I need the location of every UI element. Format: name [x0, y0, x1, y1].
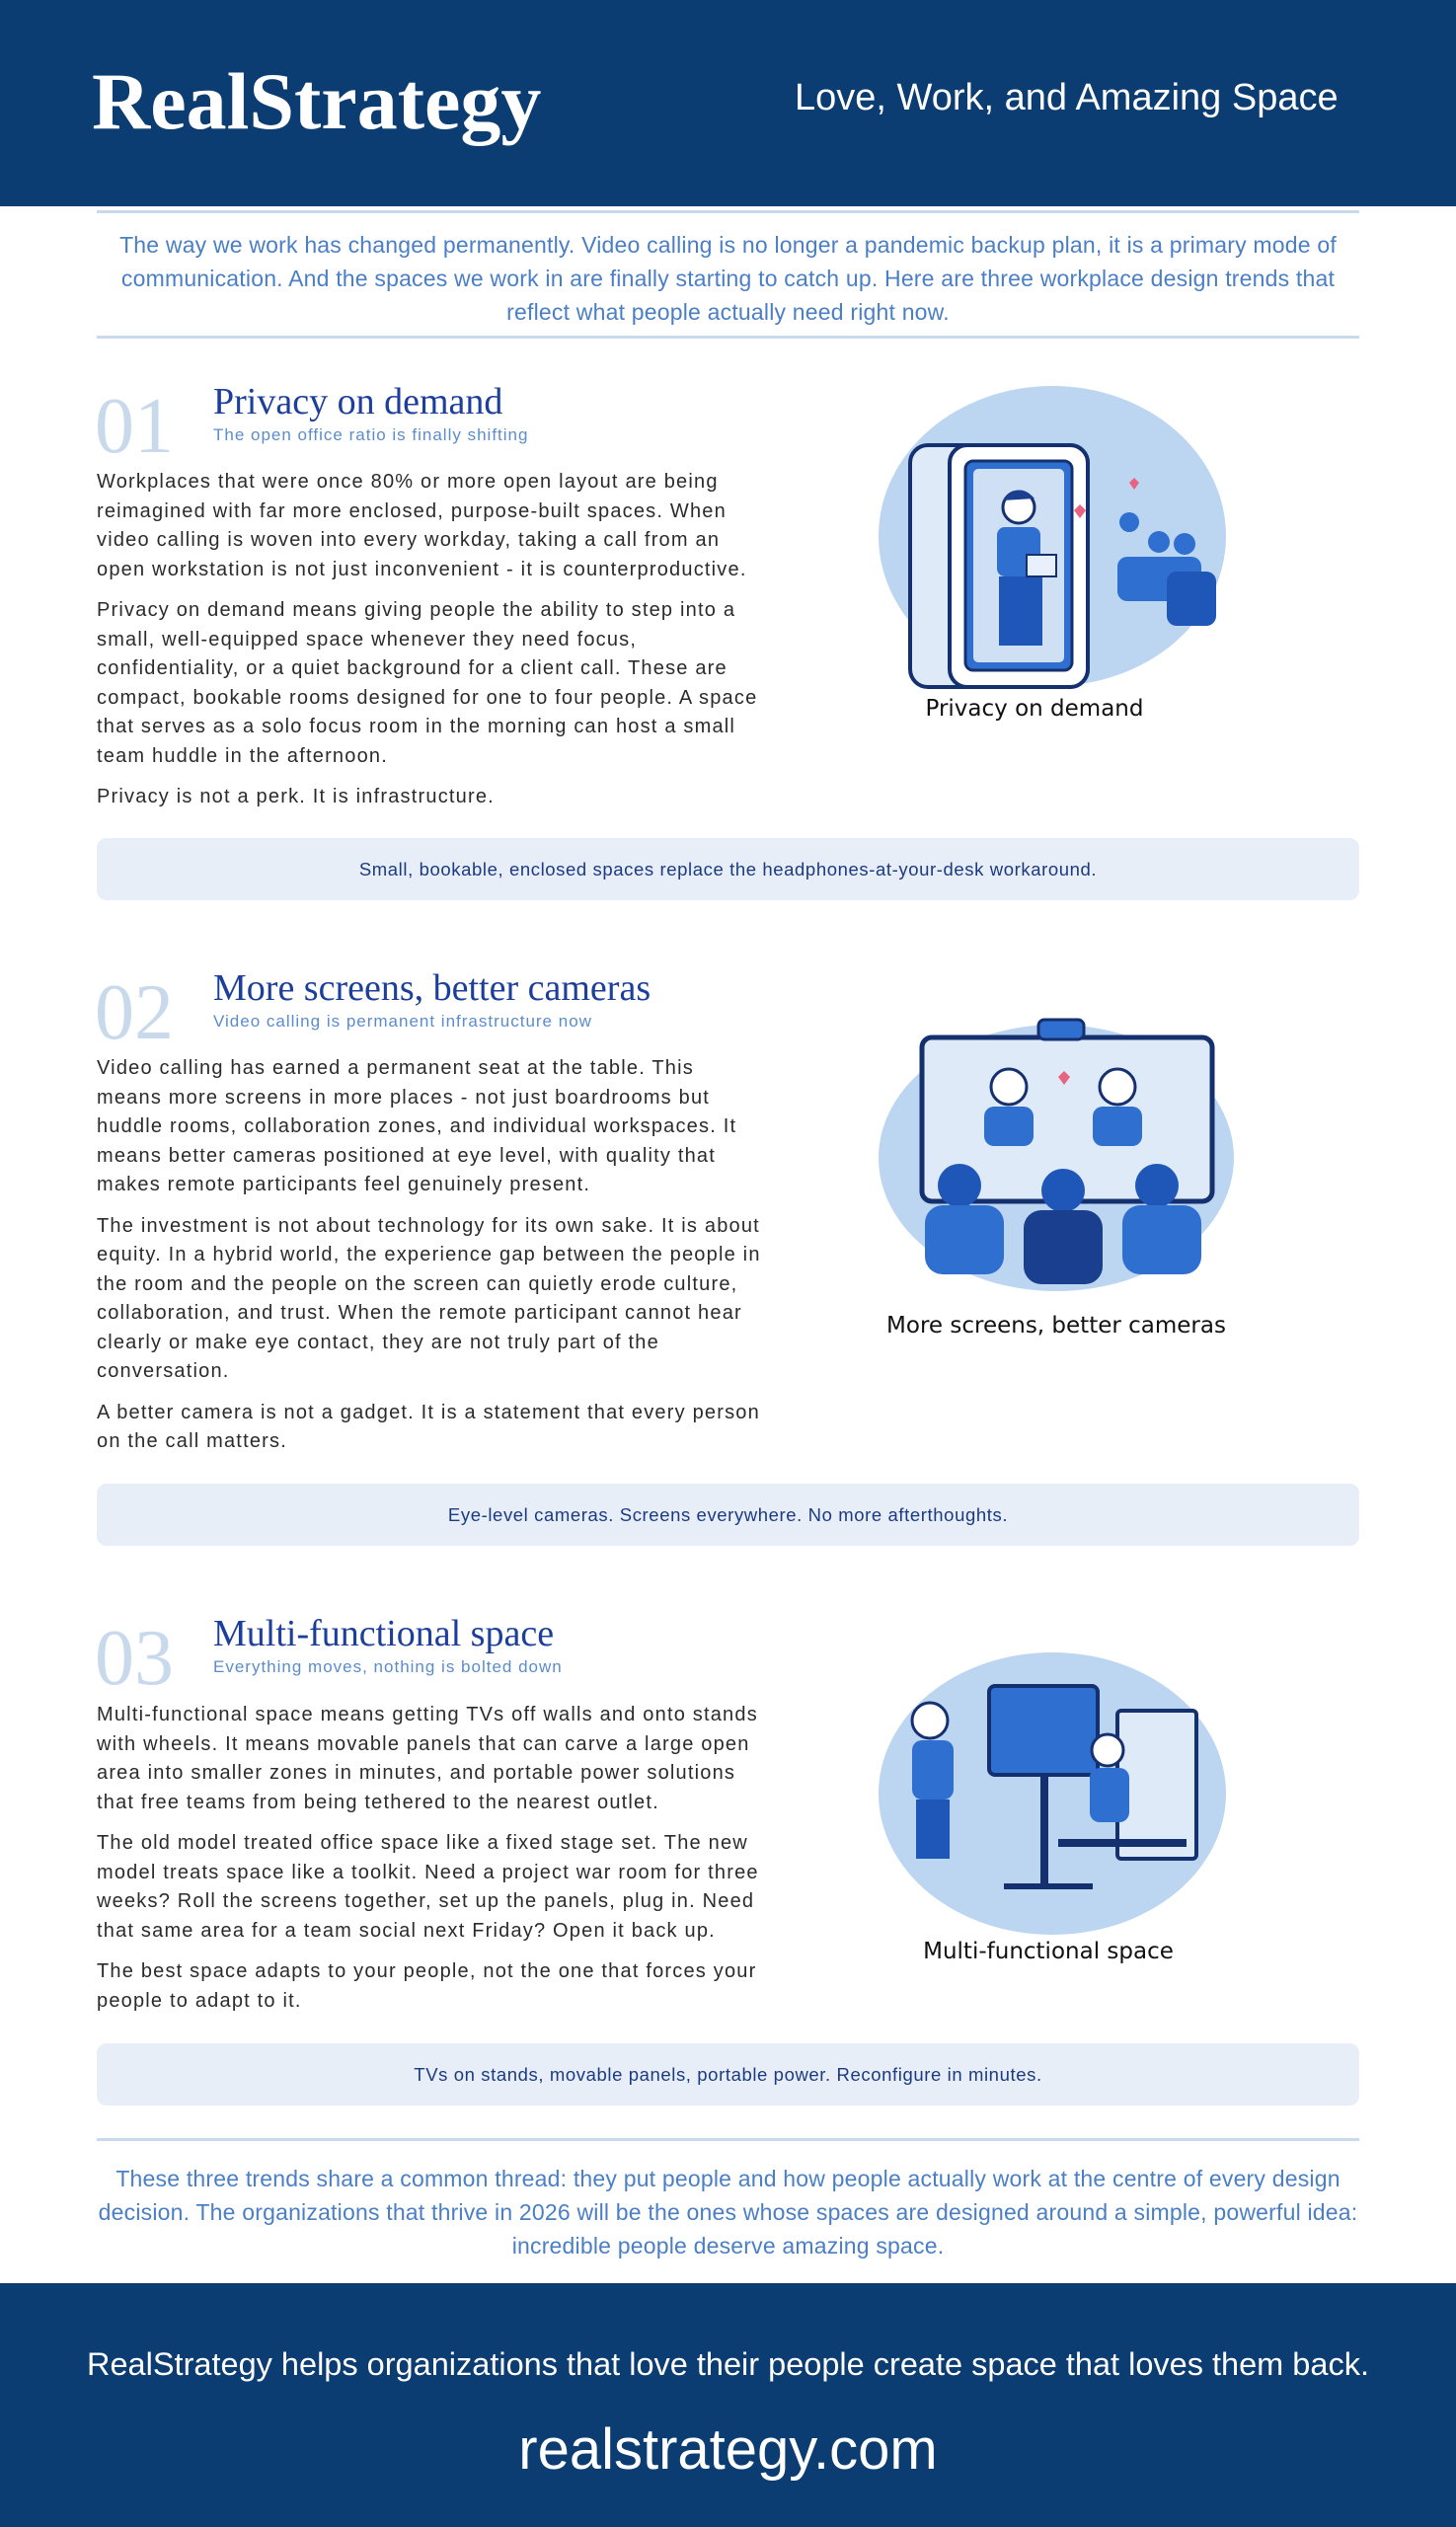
illustration: screens and cameras	[879, 1019, 1234, 1339]
section 01 body: Workplaces that were once 80% or more open layout are being	[97, 471, 719, 493]
section 02 body: makes remote participants feel genuinely present.	[97, 1174, 590, 1195]
section 02 body: equity. In a hybrid world, the experience gap between the people in	[97, 1244, 761, 1265]
section 01 body: video calling is woven into every workday, taking a call from an	[97, 529, 720, 551]
section 01 body: that serves as a solo focus room in the morning can host a small	[97, 716, 735, 737]
section 03 body: model treats space like a toolkit. Need a project war room for three	[97, 1862, 759, 1883]
section 03 title: Multi-functional space	[213, 1613, 554, 1654]
section 03 callout	[97, 2043, 1359, 2106]
intro text: reflect what people actually need right now.	[506, 299, 950, 325]
section 02 body: collaboration, and trust. When the remote participant cannot hear	[97, 1302, 742, 1324]
section 01 callout	[97, 838, 1359, 900]
section 03 body: that same area for a team social next Friday? Open it back up.	[97, 1919, 716, 1941]
section 01 body: open workstation is not just inconvenient - it is counterproductive.	[97, 559, 747, 580]
section 02 body: A better camera is not a gadget. It is a statement that every person	[97, 1402, 760, 1423]
section 02 callout: Eye-level cameras. Screens everywhere. No more afterthoughts.	[448, 1504, 1008, 1524]
section 01 number: 01	[95, 383, 174, 470]
section 02 body: means more screens in more places - not just boardrooms but	[97, 1086, 710, 1108]
section 01 body: Privacy is not a perk. It is infrastructure.	[97, 786, 495, 807]
footer	[0, 2283, 1456, 2527]
section 02 body: conversation.	[97, 1360, 230, 1382]
section 02 body: clearly or make eye contact, they are not truly part of the	[97, 1331, 659, 1352]
footer message: RealStrategy helps organizations that love their people create space that loves them back.	[87, 2346, 1369, 2382]
section 03 body	[97, 1704, 759, 2012]
section 01 body: reimagined with far more enclosed, purpose-built spaces. When	[97, 499, 727, 521]
section 03 body: that free teams from being tethered to the nearest outlet.	[97, 1791, 659, 1812]
section 02 body	[97, 1057, 761, 1452]
illustration: privacy booth: Privacy on demand	[926, 696, 1143, 722]
section 02 body: Video calling has earned a permanent seat at the table. This	[97, 1057, 694, 1079]
section 03 body: people to adapt to it.	[97, 1990, 302, 2012]
section 03 callout: TVs on stands, movable panels, portable power. Reconfigure in minutes.	[414, 2063, 1042, 2085]
section 01 callout: Small, bookable, enclosed spaces replace the headphones-at-your-desk workaround.	[359, 859, 1097, 879]
section 03 number: 03	[95, 1615, 174, 1702]
section 01 body: team huddle in the afternoon.	[97, 744, 388, 766]
section 01 body: compact, bookable rooms designed for one to four people. A space	[97, 687, 757, 709]
section 02 body: on the call matters.	[97, 1430, 287, 1452]
section 02 subtitle: Video calling is permanent infrastructure now	[213, 1012, 592, 1031]
section 02 body: The investment is not about technology for its own sake. It is about	[97, 1214, 760, 1236]
intro text	[119, 232, 1337, 325]
section 02 body: means better cameras positioned at eye level, with quality that	[97, 1145, 716, 1167]
footer url: realstrategy.com	[518, 2417, 938, 2482]
closing text	[99, 2166, 1357, 2259]
section 03 body: The best space adapts to your people, not the one that forces your	[97, 1960, 756, 1982]
illustration: screens and cameras: More screens, better cameras	[886, 1313, 1226, 1339]
closing text: decision. The organizations that thrive in 2026 will be the ones whose spaces are designed around a simple, powerful idea:	[99, 2199, 1357, 2225]
illustration: privacy booth	[879, 386, 1226, 722]
illustration: movable furniture: Multi-functional space	[923, 1939, 1174, 1964]
section 03 body: Multi-functional space means getting TVs off walls and onto stands	[97, 1704, 758, 1725]
header	[0, 0, 1456, 206]
section 03 body: weeks? Roll the screens together, set up the panels, plug in. Need	[97, 1890, 754, 1912]
section 03 subtitle: Everything moves, nothing is bolted down	[213, 1657, 563, 1676]
section 01 body: small, well-equipped space whenever they need focus,	[97, 628, 637, 650]
logo: RealStrategy	[92, 56, 541, 146]
section 03 body: area into smaller zones in minutes, and portable power solutions	[97, 1762, 735, 1784]
closing text: incredible people deserve amazing space.	[512, 2233, 944, 2259]
section 03 body: The old model treated office space like a fixed stage set. The new	[97, 1832, 748, 1854]
section 01 body	[97, 471, 757, 807]
section 01 subtitle: The open office ratio is finally shifting	[213, 425, 528, 444]
section 01 body: Privacy on demand means giving people the ability to step into a	[97, 599, 735, 621]
section 02 number: 02	[95, 969, 174, 1056]
section 02 callout	[97, 1484, 1359, 1546]
closing text: These three trends share a common thread: they put people and how people actually work at the centre of every design	[115, 2166, 1341, 2191]
illustration: movable furniture	[879, 1652, 1226, 1964]
section 01 title: Privacy on demand	[213, 381, 502, 422]
section 01 body: confidentiality, or a quiet background for a client call. These are	[97, 657, 728, 679]
section 03 body: with wheels. It means movable panels that can carve a large open	[97, 1733, 750, 1755]
intro text: communication. And the spaces we work in are finally starting to catch up. Here are three workplace design trends that	[121, 266, 1335, 291]
section 02 body: huddle rooms, collaboration zones, and individual workspaces. It	[97, 1115, 736, 1137]
intro text: The way we work has changed permanently. Video calling is no longer a pandemic backup plan, it is a primary mode of	[119, 232, 1337, 258]
section 02 title: More screens, better cameras	[213, 967, 651, 1009]
section 02 body: the room and the people on the screen can quietly erode culture,	[97, 1273, 737, 1295]
tagline: Love, Work, and Amazing Space	[795, 77, 1339, 118]
